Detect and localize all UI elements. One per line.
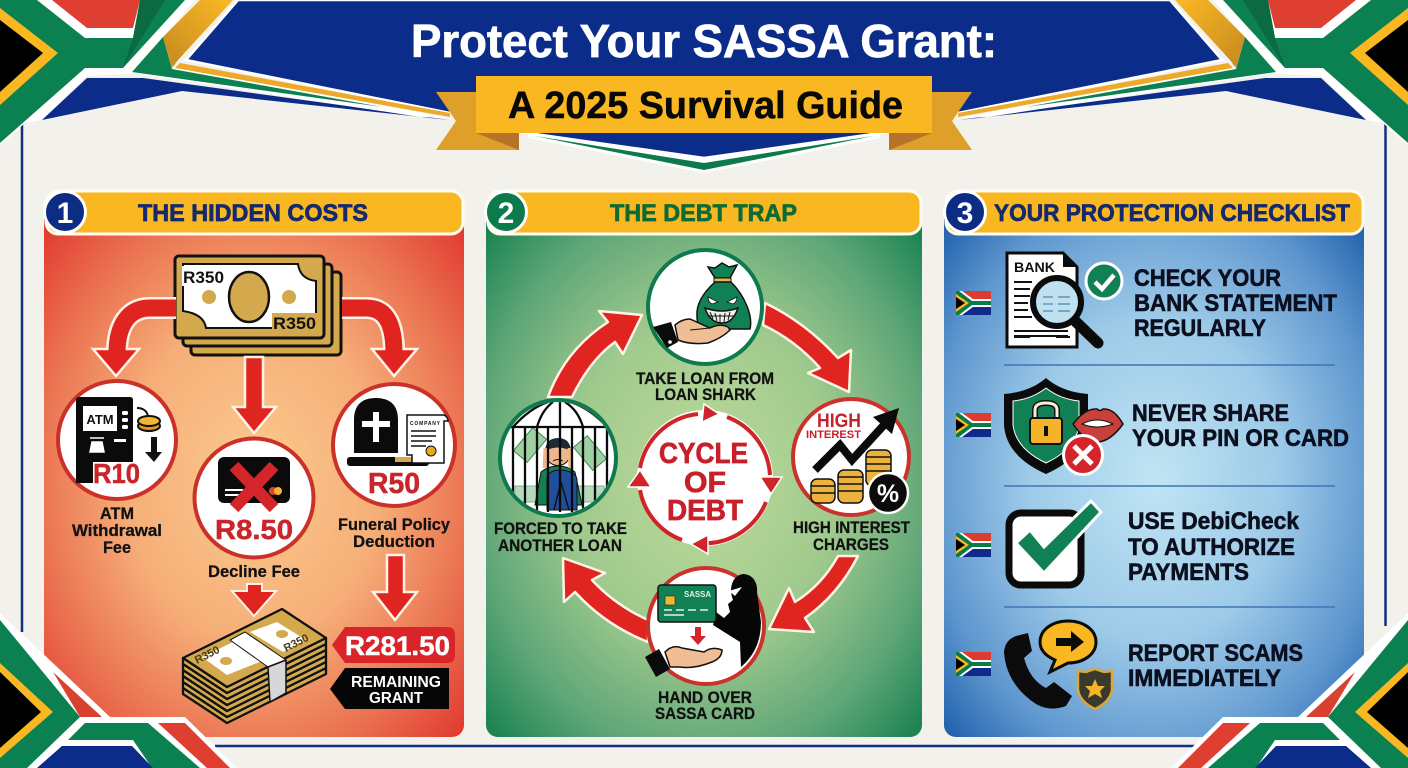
heading: the hidden costs: 1 (57, 197, 73, 230)
icon: high interest chart and coins: INTEREST (806, 429, 861, 441)
label: forced to take another loan: FORCED TO TAKE (494, 520, 627, 538)
icon: high interest chart and coins (793, 399, 909, 515)
icon: ATM circle with R10: ATM (86, 412, 114, 427)
text: never share your pin or card: NEVER SHARE (1132, 400, 1289, 427)
label: funeral policy deduction: Deduction (353, 533, 435, 551)
label: take loan from loan shark (636, 370, 774, 404)
label: hand over sassa card: SASSA CARD (655, 705, 755, 723)
text: use debicheck to authorize payments: PAYMENTS (1128, 559, 1249, 586)
heading: the debt trap (486, 191, 921, 234)
flag bullet 4 (956, 652, 991, 676)
navy page frame (22, 124, 1386, 746)
divider lines (1004, 365, 1335, 607)
text: never share your pin or card: YOUR PIN OR CARD (1132, 425, 1349, 452)
icon: ATM circle with R10 (58, 381, 176, 499)
icon: high interest chart and coins: HIGH (817, 411, 861, 432)
heading: your protection checklist: YOUR PROTECTION CHECKLIST (994, 200, 1350, 227)
icon: declined card with R8.50: R8.50 (215, 514, 293, 545)
ribbon: a 2025 survival guide: A 2025 Survival Guide (508, 85, 903, 127)
icon: bundle of remaining cash: R350 (193, 644, 222, 667)
label: ATM withdrawal fee: ATM (100, 505, 134, 523)
label: funeral policy deduction: Funeral Policy (338, 516, 451, 534)
icon: person trapped in cage (500, 400, 616, 516)
corner flag: top right (958, 0, 1408, 145)
icon: bank statement with magnifier and check (1007, 253, 1122, 347)
arrow: decline fee to remaining cash (232, 584, 276, 616)
heading: your protection checklist: 3 (957, 197, 973, 230)
icon: ATM circle with R10: R10 (93, 458, 140, 489)
ribbon: a 2025 survival guide (436, 76, 972, 150)
icon: shield with padlock, lips and cross (1004, 378, 1123, 474)
text: use debicheck to authorize payments (1128, 508, 1299, 586)
callout: R281.50: R281.50 (345, 631, 450, 661)
label: hand over sassa card: HAND OVER (658, 689, 752, 707)
panel: your protection checklist (944, 191, 1364, 737)
text: report scams immediately: REPORT SCAMS (1128, 640, 1303, 667)
icon: bank statement with magnifier and check: BANK (1014, 259, 1055, 275)
icon: bundle of remaining cash (183, 609, 326, 723)
heading: the debt trap: THE DEBT TRAP (610, 200, 797, 227)
corner flag: bottom left (0, 613, 237, 768)
label: forced to take another loan: ANOTHER LOAN (498, 537, 622, 555)
label: hand over sassa card (655, 689, 755, 723)
icon: cycle of debt: CYCLE (659, 438, 748, 470)
icon: stack of R350 banknotes: R350 (183, 268, 224, 287)
icon: bundle of remaining cash: R350 (282, 632, 311, 655)
callout: remaining grant: GRANT (369, 690, 423, 707)
icon: stack of R350 banknotes: R350 (273, 314, 316, 333)
arrow: forced loan to loan shark (548, 311, 642, 397)
text: check your bank statement regularly: BANK STATEMENT (1134, 290, 1337, 317)
heading: the debt trap: 2 (498, 197, 514, 230)
flag bullet 2 (956, 413, 991, 437)
icon: cycle of debt: OF (684, 467, 726, 499)
icon: gravestone and funeral policy with R50 (333, 384, 455, 506)
icon: declined card with R8.50 (194, 438, 314, 558)
label: high interest charges (793, 519, 910, 554)
corner flag: bottom right (1171, 613, 1408, 768)
panel: the hidden costs (44, 191, 464, 737)
icon: loan shark money bag (648, 250, 762, 364)
icon: stack of R350 banknotes (175, 256, 341, 355)
icon: hand over SASSA card to thief (645, 568, 764, 684)
icon: hand over SASSA card to thief: SASSA (684, 590, 711, 599)
text: check your bank statement regularly: CHECK YOUR (1134, 265, 1281, 292)
heading: the hidden costs (44, 191, 463, 234)
label: high interest charges: HIGH INTEREST (793, 519, 910, 537)
label: decline fee: Decline Fee (208, 563, 300, 581)
icon: gravestone and funeral policy with R50: R50 (368, 468, 420, 500)
text: check your bank statement regularly: REGULARLY (1134, 315, 1266, 342)
label: ATM withdrawal fee: Fee (103, 539, 131, 557)
text: report scams immediately: IMMEDIATELY (1128, 665, 1281, 692)
flag bullet 3 (956, 533, 991, 557)
arrow: funeral deduction to remaining grant (373, 555, 417, 620)
text: report scams immediately (1128, 640, 1303, 692)
label: take loan from loan shark: LOAN SHARK (655, 386, 756, 404)
text: never share your pin or card (1132, 400, 1349, 452)
label: funeral policy deduction (338, 516, 451, 551)
arrow: to funeral policy (342, 308, 417, 376)
label: ATM withdrawal fee: Withdrawal (72, 522, 162, 540)
corner flag: top left (0, 0, 450, 145)
callout: remaining grant (330, 668, 449, 709)
arrow: to decline fee (233, 357, 276, 433)
banner: blue title banner (186, 0, 1222, 173)
callout: R281.50 (332, 627, 455, 663)
flag bullet 1 (956, 291, 991, 315)
icon: cycle of debt: DEBT (667, 495, 743, 527)
heading: the hidden costs: THE HIDDEN COSTS (138, 200, 368, 227)
title: protect your sassa grant: Protect Your SASSA Grant: (411, 15, 997, 67)
arrow: loan shark to high interest (763, 303, 851, 392)
label: high interest charges: CHARGES (813, 536, 889, 554)
icon: high interest chart and coins: % (877, 480, 899, 508)
panel: the debt trap (486, 191, 922, 737)
icon: gravestone and funeral policy with R50: COMPANY (410, 421, 441, 427)
text: check your bank statement regularly (1134, 265, 1337, 342)
arrow: to ATM fee (93, 308, 176, 376)
callout: remaining grant: REMAINING (351, 674, 441, 691)
label: forced to take another loan (494, 520, 627, 555)
text: use debicheck to authorize payments: USE DebiCheck (1128, 508, 1299, 535)
arrow: high interest to sassa card (769, 556, 858, 632)
text: use debicheck to authorize payments: TO AUTHORIZE (1128, 534, 1295, 561)
icon: telephone, speech bubble and police badge (1004, 621, 1112, 709)
label: take loan from loan shark: TAKE LOAN FROM (636, 370, 774, 388)
heading: your protection checklist (944, 191, 1363, 234)
icon: green tick in checkbox (1009, 501, 1101, 585)
arrow: sassa card to forced loan (563, 558, 648, 642)
label: ATM withdrawal fee (72, 505, 162, 557)
icon: cycle of debt (628, 404, 782, 554)
